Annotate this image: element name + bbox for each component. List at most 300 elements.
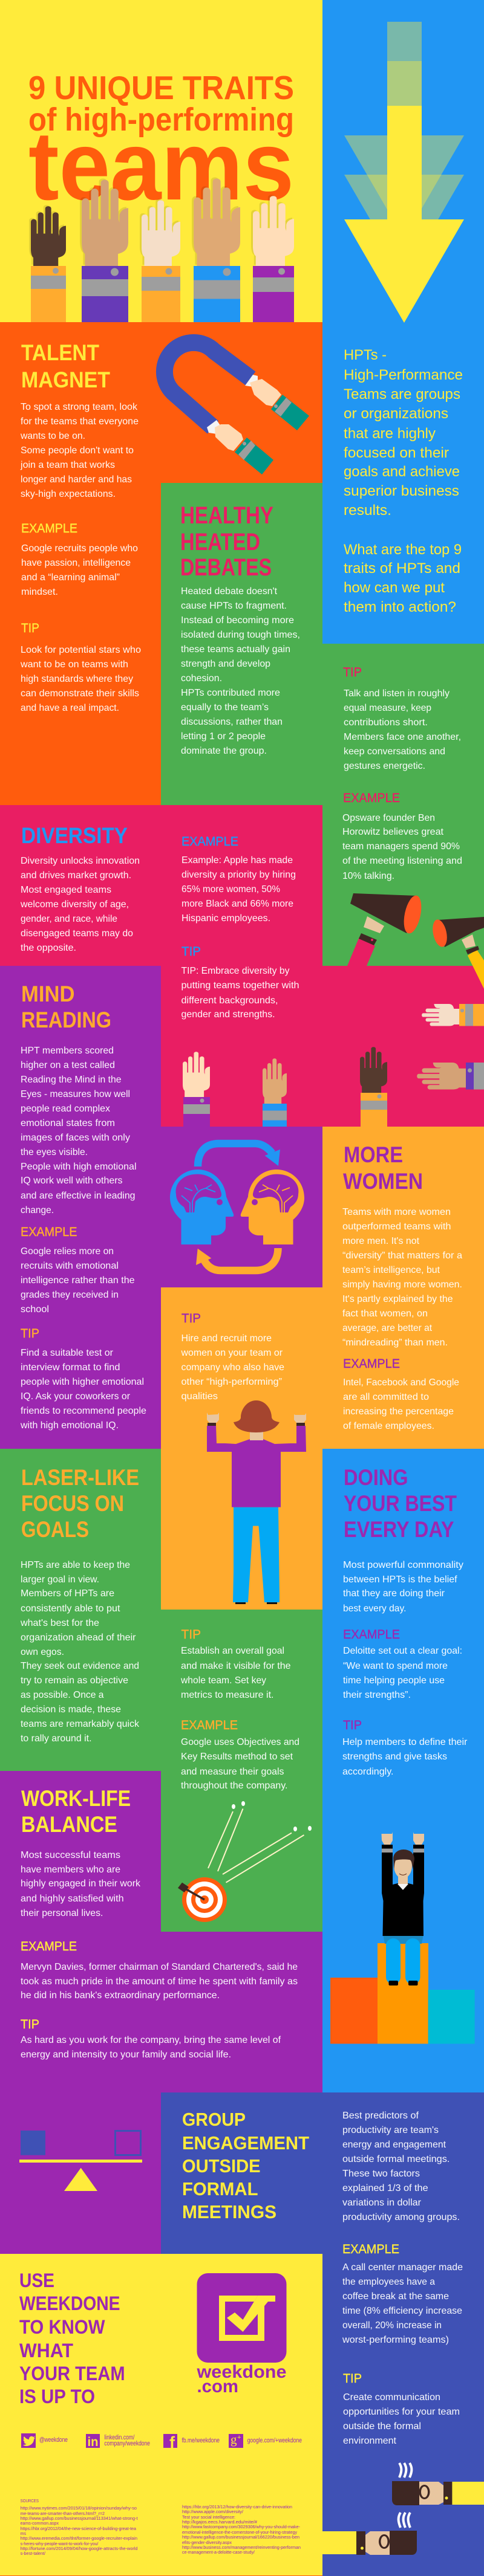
tip: group engagement: Create communication xyxy=(343,2392,440,2403)
icon: woman with raised arms xyxy=(207,1400,306,1604)
example: healthy heated debates xyxy=(342,791,462,881)
example: doing your best: Deloitte set out a clear goal: xyxy=(343,1646,462,1656)
sources: left column: http://fortune.com/2014/09/04/how-google-attracts-the-world xyxy=(21,2547,138,2551)
heading: talent magnet: MAGNET xyxy=(21,367,110,392)
panel: diversity background xyxy=(0,805,484,1127)
heading: doing your best every day: YOUR BEST xyxy=(344,1491,457,1516)
tip: diversity: TIP: Embrace diversity by xyxy=(182,966,289,976)
heading: use weekdone: YOUR TEAM xyxy=(19,2363,125,2384)
example: talent magnet xyxy=(21,522,138,597)
text: healthy heated debates: Heated debate doesn't xyxy=(181,586,278,597)
example: talent magnet: Google recruits people who xyxy=(21,543,138,554)
example: more women: Intel, Facebook and Google xyxy=(343,1377,459,1388)
text: mind reading: Reading the Mind in the xyxy=(21,1075,122,1085)
heading: more women: WOMEN xyxy=(343,1169,423,1194)
example: group engagement: A call center manager made xyxy=(342,2262,463,2273)
example: mind reading: grades they received in xyxy=(21,1290,119,1300)
text: laser-like focus: HPTs are able to keep the xyxy=(21,1560,130,1570)
social: facebook xyxy=(163,2433,220,2451)
sources: left column: http://www.nytimes.com/2015/01/18/opinion/sunday/why-so xyxy=(21,2506,137,2511)
tip: diversity: different backgrounds, xyxy=(182,995,278,1006)
heading: use weekdone xyxy=(19,2270,125,2407)
tip: diversity xyxy=(182,945,299,1020)
tip: doing your best xyxy=(342,1718,468,1777)
tip: laser-like focus: metrics to measure it. xyxy=(181,1690,273,1700)
tip: doing your best: TIP xyxy=(343,1718,362,1732)
example: mind reading xyxy=(21,1225,135,1315)
text: more women: average, are better at xyxy=(342,1323,433,1333)
text: mind reading: and are effective in leading xyxy=(21,1191,136,1201)
heading: work-life balance: BALANCE xyxy=(21,1812,117,1837)
tip: group engagement: outside the formal xyxy=(343,2421,421,2432)
heading: laser-like focus on goals: LASER-LIKE xyxy=(21,1465,139,1490)
social: google plus: google.com/+weekdone xyxy=(247,2437,302,2444)
tip: laser-like focus: Establish an overall goal xyxy=(181,1646,284,1656)
text: work-life balance: highly engaged in their work xyxy=(21,1879,141,1889)
text: more women xyxy=(342,1207,462,1348)
example: talent magnet: mindset. xyxy=(21,587,58,597)
text: more women: fact that women, on xyxy=(342,1309,428,1319)
text: more women: team’s intelligence, but xyxy=(342,1265,440,1275)
tip: talent magnet: want to be on teams with xyxy=(20,659,128,670)
tip: work-life balance: energy and intensity to your family and social life. xyxy=(21,2050,231,2060)
intro text: High-Performance xyxy=(344,367,463,383)
example: talent magnet: have passion, intelligence xyxy=(21,558,131,568)
example: laser-like focus xyxy=(181,1718,299,1791)
example: mind reading: intelligence rather than the xyxy=(21,1275,135,1286)
tip: group engagement: environment xyxy=(343,2436,397,2446)
tip: healthy heated debates xyxy=(343,665,461,771)
text: diversity: disengaged teams may do xyxy=(21,928,133,939)
icon: two heads with brains and circular arrows xyxy=(170,1144,304,1270)
tip: diversity: TIP xyxy=(182,945,201,959)
heading: mind reading: READING xyxy=(21,1008,111,1032)
example: more women: of female employees. xyxy=(343,1421,434,1431)
example: work-life balance: Mervyn Davies, former chairman of Standard Chartered's, said he xyxy=(21,1962,298,1972)
heading: doing your best every day: DOING xyxy=(344,1465,408,1490)
title: teams xyxy=(28,111,294,221)
text: more women: simply having more women. xyxy=(342,1280,462,1290)
heading: laser-like focus on goals: FOCUS ON xyxy=(21,1491,124,1516)
social: google plus: g xyxy=(231,2432,237,2447)
tip: doing your best: strengths and give tasks xyxy=(342,1752,447,1762)
heading: laser-like focus on goals xyxy=(21,1465,139,1542)
sources: right column: http://www.fastcompany.com/3029306/why-you-should-make- xyxy=(182,2525,301,2529)
text: doing your best: between HPTs is the belief xyxy=(343,1574,457,1585)
tip: healthy heated debates: gestures energetic. xyxy=(344,761,425,771)
tip: talent magnet: and have a real impact. xyxy=(21,703,119,713)
tip: talent magnet xyxy=(20,621,141,713)
social: twitter: @weekdone xyxy=(39,2436,68,2444)
example: diversity: Example: Apple has made xyxy=(182,855,293,866)
heading: talent magnet xyxy=(21,340,110,392)
text: talent magnet intro: for the teams that everyone xyxy=(21,416,139,427)
text: laser-like focus: larger goal in view. xyxy=(21,1574,99,1585)
intro text: What are the top 9 xyxy=(344,542,462,558)
intro text: traits of HPTs and xyxy=(344,560,460,577)
intro text: how can we put xyxy=(344,580,445,596)
example: mind reading: EXAMPLE xyxy=(21,1225,77,1239)
panel: group engagement background xyxy=(161,2092,484,2576)
sources: right column: ce-management-a-deloitte-case-study/ xyxy=(182,2551,255,2555)
sources: right column: emotional-intelligence-the-cornerstone-of-your-hiring-strategy xyxy=(182,2531,297,2535)
text: group engagement: explained 1/3 of the xyxy=(342,2183,428,2193)
text: more women: Teams with more women xyxy=(342,1207,451,1217)
text: laser-like focus: decision is made, these xyxy=(21,1704,121,1715)
tip: laser-like focus xyxy=(180,1628,291,1700)
text: healthy heated debates: HPTs contributed more xyxy=(181,688,280,698)
intro text: that are highly xyxy=(344,426,436,442)
text: group engagement: These two factors xyxy=(342,2169,420,2179)
social: google plus: + xyxy=(237,2434,241,2441)
text: more women: “diversity” that matters for a xyxy=(342,1251,462,1261)
icon: megaphones xyxy=(347,893,484,989)
heading: doing your best every day: EVERY DAY xyxy=(344,1517,454,1542)
example: group engagement: overall, 20% increase in xyxy=(342,2320,442,2331)
example: doing your best: their strengths”. xyxy=(343,1690,411,1700)
sources: right column: http://www.apple.com/diversity/ xyxy=(182,2510,243,2514)
example: laser-like focus: throughout the company. xyxy=(181,1781,288,1791)
text: mind reading: People with high emotional xyxy=(21,1162,137,1172)
icon: diversity hands xyxy=(183,1004,484,1127)
example: doing your best: EXAMPLE xyxy=(343,1628,400,1642)
tip: healthy heated debates: Members face one another, xyxy=(344,732,461,742)
text: weekdone.com: .com xyxy=(197,2377,238,2396)
heading: group engagement outside formal meetings: FORMAL xyxy=(182,2178,258,2199)
panel: weekdone call to action background xyxy=(0,2254,322,2575)
text: mind reading xyxy=(21,1046,137,1215)
example: doing your best xyxy=(343,1628,462,1700)
bottom edge line xyxy=(0,2575,322,2576)
panel: more women background xyxy=(161,1127,484,1610)
heading: use weekdone: USE xyxy=(19,2270,54,2291)
text: healthy heated debates: cohesion. xyxy=(181,673,222,684)
tip: talent magnet: TIP xyxy=(21,621,39,635)
example: group engagement: the employees have a xyxy=(342,2277,435,2287)
icon: coffee cups in hands xyxy=(322,2463,484,2555)
text: mind reading: emotional states from xyxy=(21,1118,115,1128)
text: diversity: Most engaged teams xyxy=(21,885,111,895)
sources: left column: SOURCES xyxy=(21,2499,39,2503)
example: mind reading: Google relies more on xyxy=(21,1246,114,1257)
text: diversity: welcome diversity of age, xyxy=(20,899,129,910)
text: healthy heated debates: Instead of becoming more xyxy=(181,615,294,626)
example: work-life balance: he did in his bank's extraordinary performance. xyxy=(21,1990,220,2001)
tip: healthy heated debates: TIP xyxy=(343,665,362,679)
tip: more women: company who also have xyxy=(182,1362,284,1373)
text: healthy heated debates: these teams actually gain xyxy=(181,644,290,655)
tip: group engagement xyxy=(343,2372,460,2446)
text: work-life balance: have members who are xyxy=(21,1865,120,1875)
example: mind reading: recruits with emotional xyxy=(21,1261,119,1271)
text: more women: “mindreading” than men. xyxy=(342,1338,448,1348)
example: group engagement: coffee break at the same xyxy=(342,2291,449,2302)
text: doing your best: that they are doing their xyxy=(343,1588,445,1599)
example: healthy heated debates: Opsware founder Ben xyxy=(342,813,435,823)
social: linkedin: in xyxy=(87,2435,98,2449)
text: laser-like focus: consistently able to put xyxy=(21,1604,120,1614)
tip: more women: other “high-performing” xyxy=(182,1377,282,1387)
sources: right column: http://www.business.com/management/reinventing-performan xyxy=(182,2546,301,2550)
example: diversity: more Black and 66% more xyxy=(182,899,293,909)
example: laser-like focus: EXAMPLE xyxy=(181,1718,238,1732)
text: healthy heated debates: isolated during tough times, xyxy=(181,630,300,640)
text: weekdone.com xyxy=(196,2362,287,2396)
heading: use weekdone: TO KNOW xyxy=(19,2316,105,2338)
tip: more women xyxy=(181,1312,284,1402)
text: diversity: gender, and race, while xyxy=(21,914,117,924)
heading: group engagement outside formal meetings: MEETINGS xyxy=(182,2201,276,2222)
text: group engagement: productivity among groups. xyxy=(342,2212,460,2222)
example: mind reading: school xyxy=(21,1304,49,1315)
example: talent magnet: EXAMPLE xyxy=(21,522,77,536)
text: talent magnet intro: Some people don't want to xyxy=(21,445,134,456)
example: group engagement: time (8% efficiency increase xyxy=(342,2306,462,2316)
text: more women: more men. It's not xyxy=(342,1236,420,1246)
sources: left column: s-best-talent/ xyxy=(21,2552,45,2556)
sources: left column: http://www.gallup.com/businessjournal/113341/what-strong-t xyxy=(21,2517,138,2521)
heading: work-life balance xyxy=(21,1786,131,1837)
example: more women: increasing the percentage xyxy=(343,1406,454,1417)
heading: healthy heated debates xyxy=(180,502,273,581)
panel: header background xyxy=(0,0,322,322)
example: more women xyxy=(343,1357,459,1431)
tip: diversity: putting teams together with xyxy=(182,980,299,991)
sources: left column: s-heres-why-people-want-to-work-for-you/ xyxy=(21,2542,99,2546)
text: work-life balance: Most successful teams xyxy=(21,1850,120,1860)
icon: balance scale xyxy=(19,2131,142,2191)
example: laser-like focus: and measure their goals xyxy=(181,1767,284,1777)
text: group engagement: productivity are team's xyxy=(342,2125,439,2135)
text: weekdone.com: weekdone xyxy=(196,2362,287,2382)
tip: mind reading: people with higher emotional xyxy=(21,1377,144,1387)
panel: work-life balance background xyxy=(0,1771,322,2254)
text: mind reading: images of faces with only xyxy=(21,1133,130,1143)
text: healthy heated debates: strength and develop xyxy=(181,659,270,669)
heading: healthy heated debates: HEATED xyxy=(180,529,260,555)
text: mind reading: Eyes - measures how well xyxy=(21,1089,130,1099)
example: more women: are all committed to xyxy=(343,1392,429,1402)
heading: group engagement outside formal meetings: OUTSIDE xyxy=(182,2155,261,2176)
tip: mind reading: interview format to find xyxy=(21,1362,120,1373)
title: 9 UNIQUE TRAITS xyxy=(28,69,294,106)
tip: work-life balance xyxy=(21,2018,281,2060)
text: laser-like focus: They seek out evidence and xyxy=(21,1661,139,1671)
title xyxy=(28,69,294,221)
tip: talent magnet: high standards where they xyxy=(21,674,133,684)
text: laser-like focus: teams are remarkably quick xyxy=(21,1719,140,1729)
sources: right column: efits-gender-diversity.aspx xyxy=(182,2541,232,2545)
tip: diversity: gender and strengths. xyxy=(182,1009,275,1020)
panel: healthy heated debates background xyxy=(161,483,484,966)
heading: laser-like focus on goals: GOALS xyxy=(21,1517,89,1542)
tip: doing your best: Help members to define their xyxy=(342,1737,468,1747)
heading: more women: MORE xyxy=(344,1142,403,1167)
text: laser-like focus: to rally around it. xyxy=(21,1733,92,1744)
tip: group engagement: TIP xyxy=(343,2372,362,2386)
panel: laser-like focus background xyxy=(0,1449,322,1932)
text: mind reading: IQ work well with others xyxy=(21,1176,122,1186)
text: healthy heated debates: dominate the group. xyxy=(181,746,267,756)
tip: laser-like focus: and make it visible for the xyxy=(181,1661,291,1671)
text: talent magnet intro: join a team that works xyxy=(20,460,115,470)
tip: mind reading: IQ. Ask your coworkers or xyxy=(21,1391,131,1402)
text: group engagement: outside formal meetings. xyxy=(342,2154,450,2164)
intro text: Teams are groups xyxy=(344,386,460,403)
intro text: or organizations xyxy=(344,406,448,422)
icon: target with darts xyxy=(178,1801,312,1922)
social: linkedin: company/weekdone xyxy=(104,2440,150,2447)
heading: group engagement outside formal meetings: GROUP xyxy=(182,2109,246,2130)
tip: laser-like focus: whole team. Set key xyxy=(180,1675,266,1686)
panel: doing your best background xyxy=(322,1449,484,2092)
sources: right column xyxy=(182,2505,301,2555)
tip: laser-like focus: TIP xyxy=(182,1628,201,1642)
text: doing your best xyxy=(343,1560,463,1614)
heading: doing your best every day xyxy=(344,1465,457,1542)
text: mind reading: HPT members scored xyxy=(21,1046,114,1056)
text: healthy heated debates xyxy=(181,586,300,756)
sources: right column: https://hbr.org/2013/12/how-diversity-can-drive-innovation xyxy=(182,2505,292,2510)
sources: right column: http://www.gallup.com/businessjournal/166220/business-ben xyxy=(182,2536,299,2540)
example: healthy heated debates: EXAMPLE xyxy=(343,791,400,805)
example: work-life balance: took as much pride in the amount of time he spent with family as xyxy=(21,1976,298,1987)
example: work-life balance xyxy=(21,1940,298,2001)
tip: more women: Hire and recruit more xyxy=(182,1333,272,1344)
example: diversity: Hispanic employees. xyxy=(182,913,270,924)
tip: healthy heated debates: contributions short. xyxy=(344,717,428,728)
text: healthy heated debates: discussions, rather than xyxy=(181,717,283,727)
example: laser-like focus: Key Results method to set xyxy=(181,1752,293,1762)
tip: healthy heated debates: equal measure, keep xyxy=(344,703,431,713)
icon: weekdone logo xyxy=(197,2273,287,2363)
panel: mind reading background xyxy=(0,966,322,1449)
tip: mind reading: with high emotional IQ. xyxy=(20,1420,119,1431)
text: laser-like focus: what's best for the xyxy=(20,1618,99,1628)
tip: mind reading: friends to recommend people xyxy=(21,1406,146,1416)
text: diversity: and drives market growth. xyxy=(21,870,131,881)
tip: healthy heated debates: keep conversations and xyxy=(344,746,445,757)
text: group engagement: energy and engagement xyxy=(342,2140,446,2150)
example: talent magnet: and a “learning animal” xyxy=(21,572,120,583)
intro text: superior business xyxy=(344,483,459,499)
text: diversity xyxy=(20,856,140,953)
icon: raised hands xyxy=(29,177,294,322)
example: more women: EXAMPLE xyxy=(343,1357,400,1371)
text: talent magnet intro: sky-high expectations. xyxy=(21,489,116,499)
tip: more women: TIP xyxy=(182,1312,201,1325)
tip: mind reading: Find a suitable test or xyxy=(21,1348,114,1358)
text: work-life balance xyxy=(21,1850,141,1918)
social: facebook: fb.me/weekdone xyxy=(182,2437,220,2444)
sources: left column: eams-common.aspx xyxy=(21,2522,59,2526)
tip: mind reading: TIP xyxy=(21,1327,39,1341)
text: work-life balance: and highly satisfied with xyxy=(21,1894,124,1904)
text: more women: outperformed teams with xyxy=(342,1222,451,1232)
heading: use weekdone: IS UP TO xyxy=(19,2386,95,2407)
text: group engagement: variations in dollar xyxy=(342,2198,422,2208)
tip: doing your best: accordingly. xyxy=(342,1767,393,1777)
tip: talent magnet: Look for potential stars who xyxy=(21,645,141,655)
example: doing your best: time helping people use xyxy=(343,1675,445,1686)
text: mind reading: change. xyxy=(21,1205,54,1215)
tip: group engagement: opportunities for your team xyxy=(343,2407,460,2417)
heading: diversity: DIVERSITY xyxy=(21,823,128,848)
sources: right column: http://kgajos.eecs.harvard.edu/mite/# xyxy=(182,2520,257,2525)
intro text: focused on their xyxy=(344,445,449,461)
heading: more women xyxy=(343,1142,423,1194)
heading: mind reading: MIND xyxy=(21,982,75,1006)
example: work-life balance: EXAMPLE xyxy=(21,1940,77,1953)
example: group engagement: worst-performing teams) xyxy=(342,2335,449,2345)
example: diversity xyxy=(182,835,296,924)
text: doing your best: Most powerful commonality xyxy=(343,1560,463,1570)
social: google plus xyxy=(229,2432,302,2448)
heading: talent magnet: TALENT xyxy=(21,340,99,365)
text: doing your best: best every day. xyxy=(343,1604,406,1614)
intro text: results. xyxy=(344,502,391,519)
text: laser-like focus: organization ahead of their xyxy=(21,1633,136,1643)
text: diversity: the opposite. xyxy=(21,943,76,953)
intro text xyxy=(344,347,463,615)
social: linkedin xyxy=(86,2434,150,2449)
sources: left column: me-teams-are-smarter-than-others.html?_r=2 xyxy=(21,2512,105,2516)
text: healthy heated debates: letting 1 or 2 people xyxy=(181,731,266,742)
text: laser-like focus: Members of HPTs are xyxy=(21,1588,114,1599)
example: diversity: EXAMPLE xyxy=(182,835,238,849)
icon: layered down arrow xyxy=(344,22,464,323)
text: healthy heated debates: cause HPTs to fragment. xyxy=(181,601,287,611)
heading: healthy heated debates: DEBATES xyxy=(180,554,272,581)
text: healthy heated debates: equally to the team’s xyxy=(181,702,269,713)
example: doing your best: “We want to spend more xyxy=(343,1661,448,1671)
text: talent magnet intro: wants to be on. xyxy=(20,431,85,441)
text: mind reading: people read complex xyxy=(21,1104,110,1114)
example: group engagement: EXAMPLE xyxy=(342,2242,399,2256)
social: facebook: f xyxy=(169,2433,175,2451)
text: talent magnet intro: longer and harder and has xyxy=(21,474,132,485)
example: diversity: 65% more women, 50% xyxy=(182,884,280,895)
example: group engagement xyxy=(342,2242,463,2345)
text: laser-like focus: as possible. Once a xyxy=(21,1690,104,1700)
heading: use weekdone: WHAT xyxy=(19,2340,73,2361)
example: laser-like focus: Google uses Objectives and xyxy=(181,1737,299,1747)
sources: right column: Test your social intelligence: xyxy=(182,2516,235,2520)
example: diversity: diversity a priority by hiring xyxy=(182,870,296,880)
heading: use weekdone: WEEKDONE xyxy=(19,2293,120,2314)
heading: group engagement outside formal meetings: ENGAGEMENT xyxy=(182,2132,309,2154)
sources: left column xyxy=(21,2499,138,2556)
icon: magnet held by two hands xyxy=(165,343,309,474)
text: mind reading: higher on a test called xyxy=(21,1060,115,1070)
intro text: them into action? xyxy=(344,599,456,615)
example: healthy heated debates: 10% talking. xyxy=(342,871,394,881)
social: linkedin: linkedin.com/ xyxy=(104,2434,135,2441)
text: work-life balance: their personal lives. xyxy=(21,1908,103,1918)
text: talent magnet intro: To spot a strong team, look xyxy=(21,402,138,412)
tip: work-life balance: TIP xyxy=(21,2018,39,2031)
sources: left column: ms xyxy=(21,2532,26,2536)
tip: more women: women on your team or xyxy=(181,1348,283,1358)
social: twitter xyxy=(21,2433,68,2448)
panel: intro background xyxy=(322,0,484,644)
text: laser-like focus: own egos. xyxy=(21,1647,64,1657)
text: mind reading: the eyes visible. xyxy=(21,1147,88,1157)
tip: healthy heated debates: Talk and listen in roughly xyxy=(344,688,450,699)
intro text: HPTs - xyxy=(344,347,387,363)
heading: work-life balance: WORK-LIFE xyxy=(21,1786,131,1811)
title: of high-performing xyxy=(28,102,294,138)
